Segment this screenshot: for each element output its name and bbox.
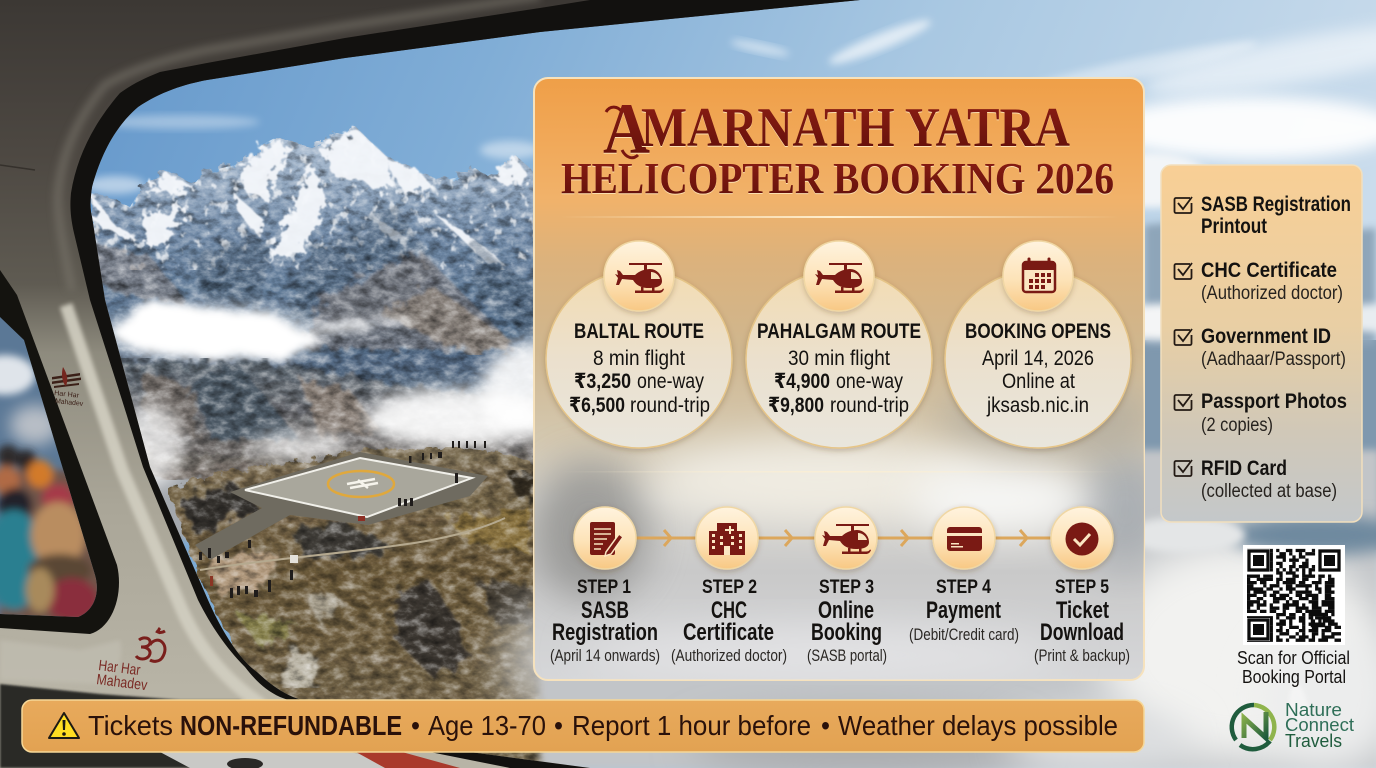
checklist text: (collected at base) [1201, 481, 1337, 502]
panel background [534, 78, 1144, 680]
ground road [195, 452, 488, 560]
snow fields [94, 128, 530, 266]
hill body [168, 447, 560, 768]
icon: hospital [696, 507, 758, 569]
wispy clouds [85, 11, 1376, 194]
warning banner: • [411, 710, 420, 741]
dark window seal [70, 0, 860, 768]
step 4: STEP 4 [936, 576, 991, 598]
step 4: (Debit/Credit card) [909, 626, 1019, 644]
dark slope patches [180, 470, 535, 688]
side window with pilgrims [0, 270, 120, 634]
helipad [245, 458, 472, 517]
card: Baltal route: ₹6,500 [569, 394, 625, 417]
logo: Nature Connect Travels [1232, 700, 1354, 751]
checklist text [1201, 193, 1351, 502]
logo mark [1232, 705, 1274, 749]
mid cloud bank [100, 303, 412, 365]
frame highlight stripe [66, 305, 262, 705]
blurred crowd [0, 440, 97, 617]
step 1: Registration [552, 619, 658, 646]
step 4 [909, 507, 1019, 644]
card: Pahalgam route: ₹4,900 [774, 370, 830, 393]
warning banner: NON-REFUNDABLE [180, 710, 402, 741]
card: Pahalgam route: round-trip [830, 394, 909, 417]
step 1: STEP 1 [577, 576, 631, 598]
sticker: Om Har Har Mahadev [96, 628, 165, 694]
sticker: Om Har Har Mahadev: Mahadev [96, 671, 149, 694]
warning banner: • [554, 710, 563, 741]
warning banner: Age 13-70 [428, 710, 546, 741]
card: Baltal route: one-way [637, 370, 704, 393]
icon: calendar [1003, 241, 1073, 311]
warning banner: Tickets [88, 710, 173, 741]
QR caption: Scan for Official [1237, 648, 1350, 668]
panel: documents checklist [1161, 165, 1362, 522]
checklist text: Government ID [1201, 325, 1331, 348]
card: Baltal route: 8 min flight [593, 347, 685, 370]
lower right cloud deck [540, 450, 1376, 768]
process connector arrows [636, 530, 1051, 546]
step 2: STEP 2 [702, 576, 757, 598]
moulding lip [58, 0, 540, 290]
card: Pahalgam route [746, 241, 932, 448]
card: Pahalgam route: one-way [836, 370, 903, 393]
step 3: STEP 3 [819, 576, 874, 598]
step 4: Payment [926, 597, 1001, 624]
side window seal [0, 270, 119, 634]
panel backdrop tints [530, 380, 1175, 683]
haze underlay [88, 340, 548, 540]
card: Baltal route: round-trip [630, 394, 710, 417]
warning banner: Weather delays possible [838, 710, 1118, 741]
sticker: trident Har Har Mahadev: Har Har [54, 390, 80, 400]
title: MARNATH YATRA [641, 97, 1070, 159]
card: booking opens [945, 241, 1131, 448]
sticker: Om Har Har Mahadev: Har Har [98, 657, 141, 679]
frame panel [0, 0, 860, 768]
icon: helicopter [804, 241, 874, 311]
QR code [1243, 545, 1345, 645]
step 2 [671, 507, 787, 665]
panel: main booking card [530, 78, 1175, 683]
icon: form and pen [574, 507, 636, 569]
QR caption [1237, 648, 1350, 687]
snow mountain range [90, 125, 533, 394]
title: HELICOPTER BOOKING 2026 [561, 154, 1114, 203]
side window glass [0, 317, 97, 617]
icon: helicopter [815, 507, 877, 569]
checklist text: (Authorized doctor) [1201, 283, 1343, 304]
rock shadows [92, 205, 535, 355]
card: Baltal route: ₹3,250 [574, 370, 631, 393]
checklist text: Printout [1201, 215, 1267, 238]
step 2: Certificate [683, 619, 774, 646]
checklist text: (Aadhaar/Passport) [1201, 349, 1346, 370]
step 3: (SASB portal) [807, 647, 887, 665]
card: booking opens: April 14, 2026 [982, 347, 1094, 370]
step 2: (Authorized doctor) [671, 647, 787, 665]
step 5: STEP 5 [1055, 576, 1109, 598]
checklist text: CHC Certificate [1201, 259, 1337, 282]
step 3: Booking [811, 619, 882, 646]
warning banner: Report 1 hour before [572, 710, 811, 741]
tiny people [199, 441, 486, 598]
card: Pahalgam route: 30 min flight [788, 347, 890, 370]
card: Baltal route: BALTAL ROUTE [574, 320, 704, 343]
step 5: Download [1040, 619, 1124, 646]
checklist text: (2 copies) [1201, 415, 1273, 436]
icon: check [1051, 507, 1113, 569]
step 1: SASB [581, 597, 629, 624]
step 5: Ticket [1056, 597, 1109, 624]
checklist text: RFID Card [1201, 457, 1287, 480]
logo: Nature Connect Travels: Connect [1285, 715, 1354, 735]
step 1: (April 14 onwards) [550, 647, 660, 665]
step 5: (Print & backup) [1034, 647, 1130, 665]
low clouds [118, 340, 600, 487]
title: A [603, 89, 650, 169]
step 1 [550, 507, 660, 665]
warning banner: • [821, 710, 830, 741]
card: Baltal route [546, 241, 732, 448]
hazy cloud at cliff edge [500, 600, 620, 720]
icon: Om [136, 628, 165, 661]
step 3 [807, 507, 887, 665]
QR caption: Booking Portal [1242, 667, 1346, 687]
helipad mountain [168, 441, 620, 768]
icon: helicopter [604, 241, 674, 311]
card: Pahalgam route: ₹9,800 [768, 394, 824, 417]
sticker: trident Har Har Mahadev [52, 367, 84, 408]
right distant mountains [1090, 152, 1376, 550]
finder patterns [1247, 549, 1341, 641]
card: Pahalgam route: PAHALGAM ROUTE [757, 320, 921, 343]
snow speckle [91, 131, 533, 270]
card: booking opens: jksasb.nic.in [986, 394, 1089, 417]
dark lower cabin [0, 684, 290, 768]
red strip [356, 752, 460, 768]
step 2: CHC [711, 597, 747, 624]
checklist text: Passport Photos [1201, 390, 1347, 413]
sticker: trident Har Har Mahadev: Mahadev [55, 398, 84, 408]
logo: Nature Connect Travels: Travels [1285, 731, 1342, 751]
lower panel bevel [0, 640, 121, 684]
title [561, 89, 1114, 203]
warning banner [22, 700, 1144, 752]
step 5 [1034, 507, 1130, 665]
icon: payment card [933, 507, 995, 569]
icon: warning triangle [49, 713, 79, 738]
card: booking opens: BOOKING OPENS [965, 320, 1111, 343]
checkboxes [1174, 197, 1192, 476]
cabin window frame [0, 0, 860, 768]
step 3: Online [818, 597, 874, 624]
card: booking opens: Online at [1002, 370, 1075, 393]
lower rocky ridge [115, 358, 540, 480]
logo: Nature Connect Travels: Nature [1285, 700, 1342, 720]
